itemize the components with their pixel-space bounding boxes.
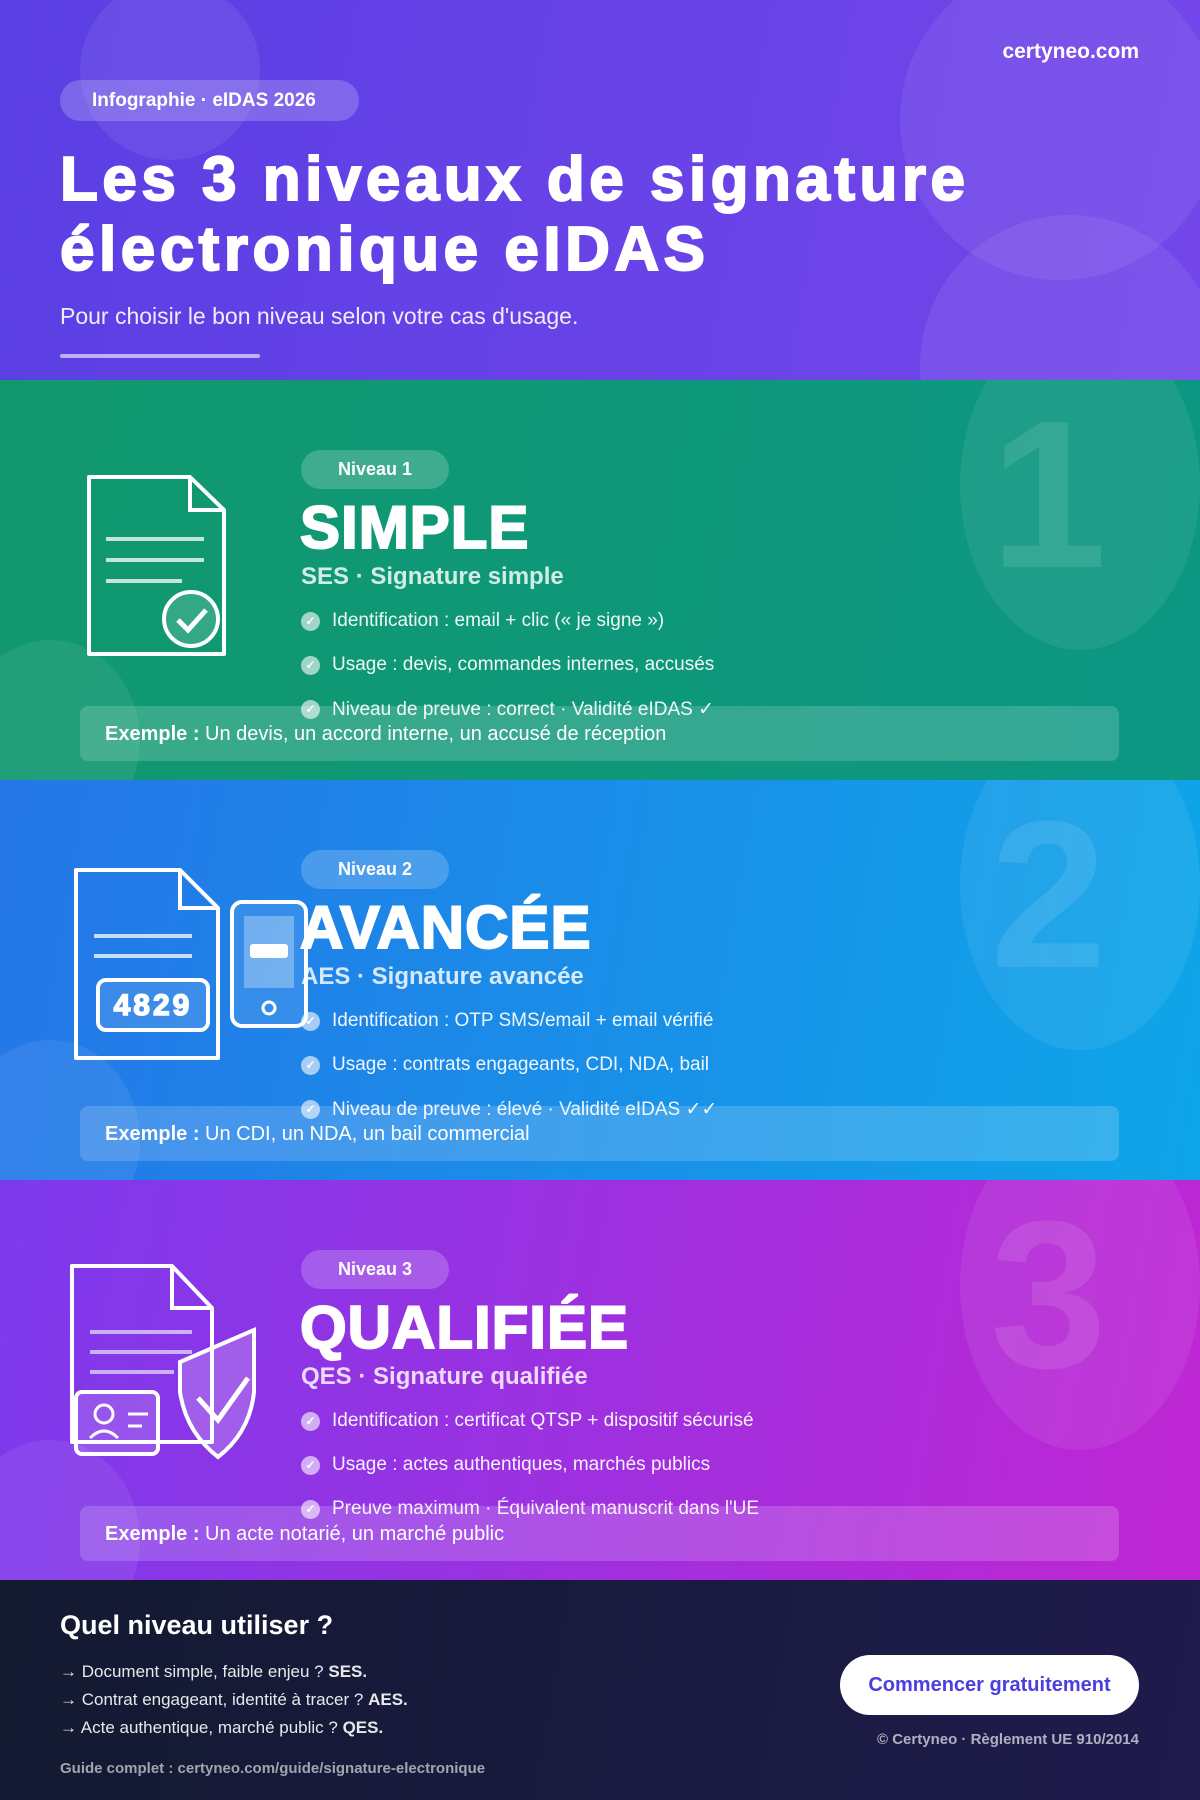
tag pill: Infographie · eIDAS 2026 <box>92 90 316 111</box>
decision list: → Contrat engageant, identité à tracer ? AES. <box>60 1690 408 1709</box>
bullets <box>301 1410 759 1519</box>
big number 1: 1 <box>990 380 1107 612</box>
footer <box>0 1580 1200 1800</box>
cta button <box>840 1655 1139 1715</box>
title: électronique eIDAS <box>60 215 709 284</box>
level pill: Niveau 1 <box>338 459 412 479</box>
big number 2: 2 <box>990 780 1107 1012</box>
subtitle: Pour choisir le bon niveau selon votre cas d'usage. <box>60 303 578 329</box>
guide link: Guide complet : certyneo.com/guide/signature-electronique <box>60 1760 485 1777</box>
title <box>60 145 970 284</box>
bullets: Identification : certificat QTSP + dispositif sécurisé <box>332 1410 754 1431</box>
bullets: Identification : email + clic (« je signe ») <box>332 610 664 631</box>
example box: Exemple : Un CDI, un NDA, un bail commercial <box>105 1123 530 1145</box>
bullets: ✓ <box>305 1458 316 1472</box>
level pill <box>301 850 449 889</box>
level title: QUALIFIÉE <box>300 1294 629 1361</box>
bullets: ✓ <box>305 702 316 716</box>
bullets: ✓ <box>305 1014 316 1028</box>
bullets: Usage : actes authentiques, marchés publics <box>332 1454 710 1475</box>
level subtitle: SES · Signature simple <box>301 563 564 590</box>
bullets <box>301 610 714 720</box>
bullets: ✓ <box>305 1058 316 1072</box>
icon: document with OTP and phone <box>74 868 308 1060</box>
example box: Exemple : Un acte notarié, un marché public <box>105 1523 504 1545</box>
example box <box>80 1506 1119 1561</box>
bullets: Niveau de preuve : correct · Validité eIDAS ✓ <box>332 699 714 720</box>
level title: SIMPLE <box>300 494 529 561</box>
panel: niveau 3 qualifiee <box>0 1180 1200 1580</box>
bullets: Preuve maximum · Équivalent manuscrit dans l'UE <box>332 1498 759 1519</box>
site url: certyneo.com <box>1002 40 1139 63</box>
title: Les 3 niveaux de signature <box>60 145 970 214</box>
example box: Exemple : Un devis, un accord interne, un accusé de réception <box>105 723 666 745</box>
level title: AVANCÉE <box>300 894 591 961</box>
footer heading: Quel niveau utiliser ? <box>60 1610 333 1640</box>
copyright: © Certyneo · Règlement UE 910/2014 <box>877 1731 1139 1748</box>
level subtitle: QES · Signature qualifiée <box>301 1363 588 1390</box>
bullets: Niveau de preuve : élevé · Validité eIDAS ✓✓ <box>332 1099 717 1120</box>
example box <box>80 706 1119 761</box>
panel: niveau 2 avancee <box>0 780 1200 1180</box>
decision list <box>60 1662 408 1737</box>
level subtitle: AES · Signature avancée <box>301 963 584 990</box>
decision list: → Document simple, faible enjeu ? SES. <box>60 1662 367 1681</box>
bullets: ✓ <box>305 614 316 628</box>
bullets: ✓ <box>305 1502 316 1516</box>
level pill <box>301 1250 449 1289</box>
big number 3: 3 <box>990 1180 1107 1412</box>
icon: document with OTP and phone: 4829 <box>114 989 192 1022</box>
bullets: ✓ <box>305 658 316 672</box>
bullets: ✓ <box>305 1102 316 1116</box>
bullets: Identification : OTP SMS/email + email vérifié <box>332 1010 713 1031</box>
bullets: ✓ <box>305 1414 316 1428</box>
tag pill <box>60 80 359 121</box>
level pill <box>301 450 449 489</box>
icon: document id card shield <box>70 1264 256 1460</box>
icon: document with check <box>87 475 226 656</box>
example box <box>80 1106 1119 1161</box>
cta button: Commencer gratuitement <box>868 1674 1111 1696</box>
bullets: Usage : devis, commandes internes, accusés <box>332 654 714 675</box>
level pill: Niveau 3 <box>338 1259 412 1279</box>
level pill: Niveau 2 <box>338 859 412 879</box>
bullets: Usage : contrats engageants, CDI, NDA, bail <box>332 1054 709 1075</box>
panel: niveau 1 simple <box>0 380 1200 780</box>
header <box>0 0 1200 380</box>
decision list: → Acte authentique, marché public ? QES. <box>60 1718 383 1737</box>
bullets <box>301 1010 717 1120</box>
